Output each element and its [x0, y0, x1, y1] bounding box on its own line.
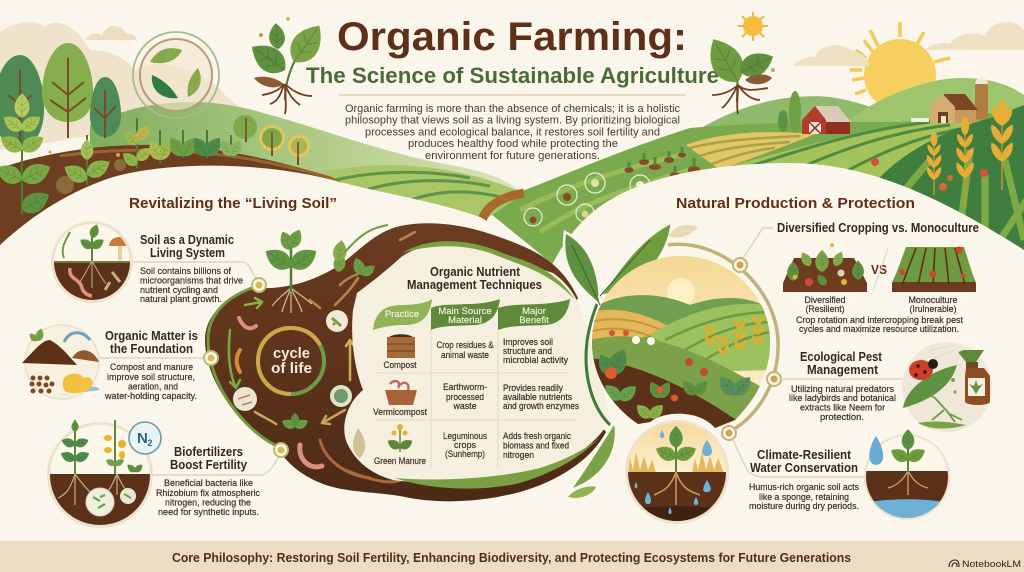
row: green manure: Leguminous — [443, 431, 487, 441]
small round trees — [233, 115, 310, 165]
icon: legumes with nitrogen: N — [137, 430, 148, 447]
trees by barn — [778, 91, 801, 133]
block: ecological pest management: Utilizing natural predators — [791, 384, 894, 394]
icon: living soil — [50, 221, 134, 306]
striped fields — [686, 132, 815, 170]
circular field illustration — [590, 255, 772, 430]
block: organic matter: improve soil structure, — [107, 372, 195, 382]
intro paragraph: Organic farming is more than the absence of chemicals; it is a holistic — [345, 103, 680, 115]
block: biofertilizers: Biofertilizers — [174, 445, 243, 459]
row: compost: microbial activity — [503, 355, 568, 365]
leaves over soil — [280, 252, 378, 431]
tan barn and silo — [911, 78, 988, 123]
block: water conservation — [749, 429, 950, 520]
light green meadow — [90, 102, 530, 200]
row: green manure — [374, 424, 571, 466]
icon: crate — [387, 334, 415, 358]
icon: small sun — [738, 12, 768, 41]
table header: Main Source — [438, 306, 492, 317]
block: water conservation: Climate-Resilient — [757, 448, 852, 462]
heading: natural production: Natural Production & Protection — [676, 195, 915, 212]
row: green manure: Adds fresh organic — [503, 431, 571, 441]
block: soil as dynamic system: Soil as a Dynamic — [140, 233, 234, 247]
vs: VS — [871, 262, 887, 277]
cloud — [85, 26, 137, 40]
row: green manure: biomass and fixed — [503, 440, 569, 450]
block: ecological pest management: extracts like Neem for — [800, 402, 885, 412]
left trees — [0, 43, 121, 150]
icon: flowering plant — [385, 424, 415, 452]
row: compost: Crop residues & — [436, 340, 494, 350]
dark crops and wheat — [860, 100, 1024, 262]
icon: diversified bed — [783, 243, 867, 292]
block: soil as dynamic system: nutrient cycling and — [140, 285, 218, 295]
middle left field — [322, 165, 524, 222]
row: vermicompost: Earthworm- — [443, 382, 487, 392]
illustration: right farm landscape — [322, 22, 1024, 270]
block: soil as dynamic system — [50, 221, 243, 306]
row: vermicompost: available nutrients — [503, 392, 572, 402]
row: compost: structure and — [503, 346, 552, 356]
row: compost: Compost — [384, 360, 417, 370]
cycle ring: cycle — [273, 345, 310, 362]
title: Organic Farming: — [337, 15, 687, 59]
row: green manure: Green Manure — [374, 456, 426, 466]
block: ecological pest management — [789, 342, 992, 432]
block: organic matter: Organic Matter is — [105, 329, 198, 343]
hills — [690, 96, 880, 150]
block: water conservation: moisture during dry periods. — [749, 501, 859, 511]
row: green manure: nitrogen — [503, 450, 534, 460]
table header — [373, 299, 570, 330]
connector nodes left — [204, 278, 288, 457]
block: biofertilizers — [45, 420, 260, 534]
vs — [871, 248, 888, 291]
icon: legumes with nitrogen — [45, 420, 161, 534]
row: vermicompost: and growth enzymes — [503, 401, 579, 411]
soil creatures and arrows — [229, 232, 415, 482]
icon: ladybird mantis and spray — [902, 342, 992, 432]
block: water conservation: Humus-rich organic soil acts — [749, 482, 859, 492]
panel: nutrient table: Management Techniques — [407, 278, 542, 292]
clouds — [792, 22, 1024, 66]
icon: title plant right — [700, 32, 778, 114]
row: compost — [384, 334, 568, 370]
young plants on soil band — [0, 90, 245, 218]
NotebookLM badge: NotebookLM — [962, 559, 1021, 570]
row: vermicompost: Vermicompost — [373, 407, 427, 417]
footer banner: Core Philosophy: Restoring Soil Fertility, Enhancing Biodiversity, and Protecting Ecosystems for Future Generations — [172, 551, 851, 565]
block: diversified cropping: Monoculture — [908, 295, 958, 305]
icon: legumes with nitrogen: 2 — [148, 438, 153, 448]
dirt path — [481, 193, 540, 270]
row: compost: animal waste — [441, 350, 489, 360]
footer banner — [0, 541, 1024, 572]
divider — [339, 94, 686, 96]
block: soil as dynamic system: Soil contains billions of — [140, 266, 231, 276]
block: biofertilizers: nitrogen, reducing the — [165, 498, 251, 508]
green rim — [208, 288, 275, 445]
panel: nutrient table — [344, 241, 610, 489]
vine: central plant — [564, 222, 698, 498]
subtitle: The Science of Sustainable Agriculture — [306, 63, 719, 88]
icon: worm bin — [385, 381, 417, 405]
microbe circles — [233, 310, 352, 411]
icon: compost and sponge — [22, 324, 100, 400]
node dots on ring — [722, 258, 781, 440]
block: diversified cropping — [777, 221, 979, 334]
block: organic matter: water-holding capacity. — [104, 391, 197, 401]
block: water conservation: like a sponge, retaining — [759, 492, 849, 502]
block: diversified cropping: Crop rotation and intercropping break pest — [796, 315, 963, 325]
cycle ring — [258, 328, 324, 394]
block: soil as dynamic system: Living System — [150, 246, 225, 260]
small lifecycle badges — [524, 173, 650, 226]
connector lines right — [733, 228, 905, 477]
table header: Major — [522, 306, 546, 317]
icon: recycling leaves ring — [133, 32, 219, 118]
icon: soil with water — [864, 429, 950, 520]
sprout above soil — [261, 225, 388, 313]
table header: Benefit — [519, 315, 549, 326]
cycle ring: of life — [271, 360, 312, 377]
table title: Organic Nutrient — [430, 265, 521, 279]
icon: monoculture bed — [892, 246, 976, 292]
row: green manure: crops — [454, 440, 476, 450]
block: diversified cropping: Diversified Cropping vs. Monoculture — [777, 221, 979, 235]
table header: Practice — [385, 309, 419, 320]
icon: title plant left — [245, 17, 330, 114]
block: organic matter: aeration, and — [128, 382, 178, 392]
block: diversified cropping: cycles and maximize resource utilization. — [799, 324, 959, 334]
row: compost: Improves soil — [503, 337, 553, 347]
block: organic matter — [20, 323, 198, 403]
heading: living soil: Revitalizing the “Living Soil” — [129, 195, 337, 212]
block: biofertilizers: need for synthetic inputs. — [158, 507, 259, 517]
block: ecological pest management: like ladybirds and botanical — [789, 393, 896, 403]
block: soil as dynamic system: microorganisms that drive — [140, 276, 243, 286]
table header: Material — [448, 315, 482, 326]
block: soil as dynamic system: natural plant growth. — [140, 294, 222, 304]
intro paragraph: produces healthy food while protecting the — [408, 138, 618, 150]
block: organic matter: Compost and manure — [110, 362, 193, 372]
block: ecological pest management: Ecological Pest — [800, 350, 883, 364]
block: ecological pest management: Management — [807, 363, 879, 377]
panel: left cream panel — [0, 166, 540, 541]
block: biofertilizers: Beneficial bacteria like — [164, 478, 253, 488]
big sun — [850, 22, 950, 111]
block: diversified cropping: (Resilient) — [806, 304, 844, 314]
block: diversified cropping: Diversified — [804, 295, 846, 305]
red barn — [802, 106, 851, 134]
row: vermicompost: waste — [453, 401, 476, 411]
row: vermicompost: Provides readily — [503, 383, 563, 393]
central soil blob — [205, 223, 606, 501]
intro paragraph: philosophy that views soil as a living system. By prioritizing biological — [345, 115, 680, 127]
row: green manure: (Sunhemp) — [445, 449, 485, 459]
block: ecological pest management: protection. — [820, 412, 864, 422]
block: diversified cropping: (Irulnerable) — [910, 304, 956, 314]
small seedlings in pots — [624, 147, 700, 178]
ring around field — [668, 244, 778, 434]
decorative seed leaf — [353, 428, 365, 458]
block: water conservation: Water Conservation — [750, 461, 858, 475]
block: organic matter: the Foundation — [110, 342, 193, 356]
illustration: left forest landscape — [0, 22, 530, 265]
connector lines left — [100, 262, 281, 475]
intro paragraph: environment for future generations. — [425, 150, 600, 162]
row: vermicompost — [373, 381, 579, 417]
soil band — [0, 145, 350, 265]
block: biofertilizers: Rhizobium fix atmospheric — [156, 488, 260, 498]
panel: right cream panel — [540, 163, 1024, 541]
intro paragraph — [345, 103, 680, 162]
block: biofertilizers: Boost Fertility — [170, 458, 247, 472]
distant tan hills — [0, 22, 245, 150]
row: vermicompost: processed — [446, 392, 484, 402]
intro paragraph: processes and ecological balance, it restores soil fertility and — [365, 126, 660, 138]
block: water circle — [625, 420, 729, 527]
table grid — [375, 330, 577, 468]
